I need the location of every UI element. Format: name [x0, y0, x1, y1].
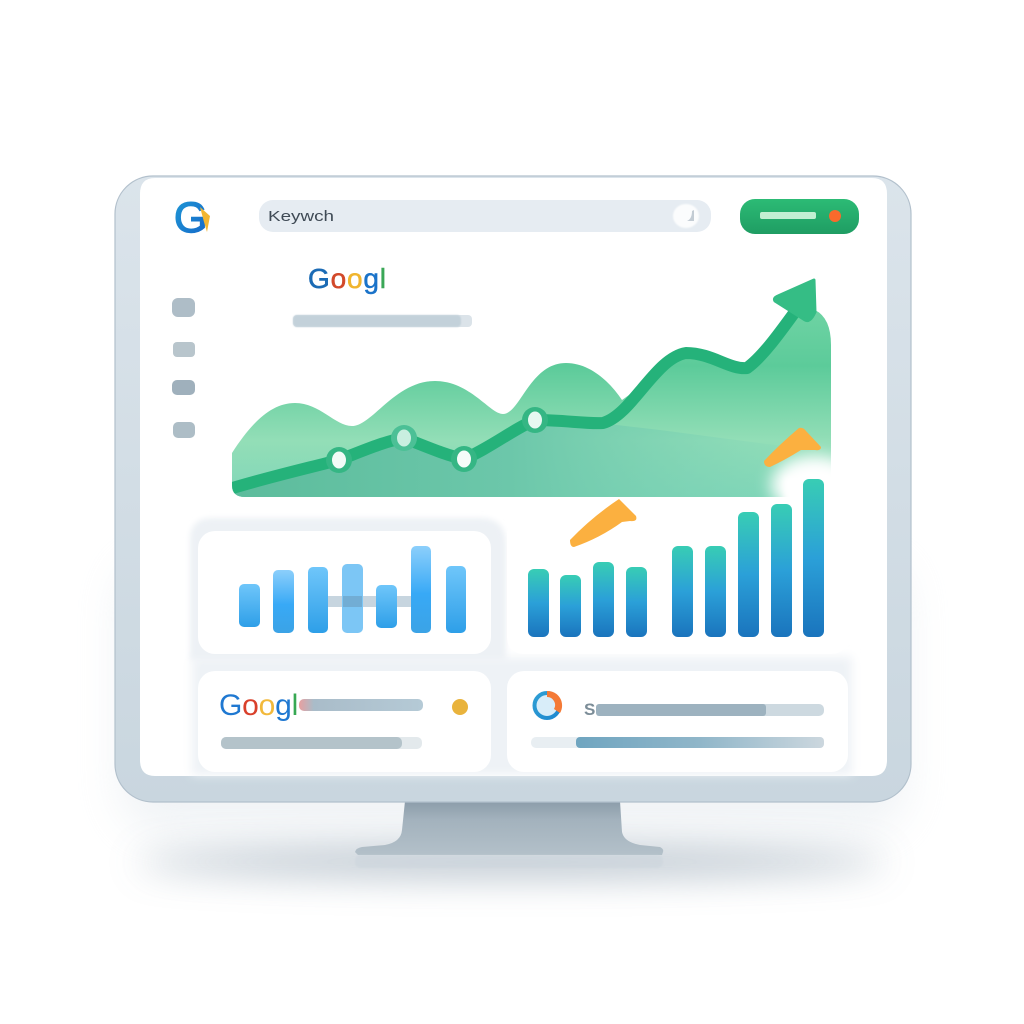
search knob: [673, 204, 699, 228]
header: green button: [740, 199, 859, 234]
chart subtitle bar: [293, 315, 472, 327]
ground shadow: [120, 560, 906, 877]
teal-blue bars: [528, 479, 824, 637]
orange arrow upper: [764, 428, 821, 467]
panel card: [507, 531, 848, 654]
lower row tint: [192, 657, 852, 775]
small label glyph: S: [584, 700, 595, 719]
area chart: [232, 278, 831, 497]
white fade at lower right: [771, 455, 859, 515]
stand neck and foot: [355, 801, 663, 855]
panel card: [198, 531, 491, 654]
monitor stand: [355, 801, 663, 868]
card bar bottom: [221, 737, 422, 749]
header: search bar: [259, 200, 711, 232]
search text: Keywch: [268, 208, 334, 225]
bottom right card: [507, 671, 848, 772]
area fill: [232, 310, 831, 497]
right bar panel: [507, 479, 848, 654]
card bar top: [299, 699, 423, 711]
header: logo mark: G: [174, 194, 207, 242]
panel halo: [190, 518, 506, 660]
Google logo text: Googl: [219, 689, 298, 722]
card bar top: [596, 704, 824, 716]
status dot: [452, 699, 468, 715]
monitor screen: [140, 178, 887, 776]
left bar panel: [190, 518, 506, 660]
data points: [326, 407, 548, 473]
infographic: monitor showing keyword dashboard: [114, 175, 912, 898]
horizontal overlay bar: [328, 596, 411, 607]
foot reflection: [355, 855, 663, 868]
ring logo: [534, 691, 562, 718]
orange arrow lower: [570, 499, 636, 547]
blue bars: [239, 546, 466, 633]
trend line: [226, 305, 800, 490]
chart heading: Google logo text: Googl: [308, 263, 387, 294]
card bar bottom: [531, 737, 824, 748]
monitor frame: [115, 176, 911, 802]
bottom left card: [198, 671, 491, 772]
darker area beneath the trend line: [232, 425, 728, 497]
sidebar icons: [172, 298, 195, 438]
arrow head: [774, 280, 815, 321]
